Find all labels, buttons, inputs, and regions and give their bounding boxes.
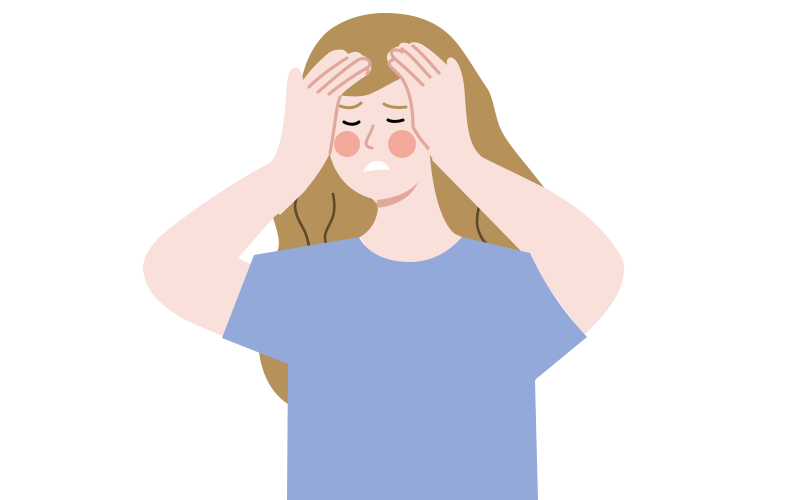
right finger lines — [389, 46, 439, 148]
t-shirt — [222, 237, 587, 500]
right arm — [432, 135, 624, 335]
left finger lines — [309, 58, 370, 153]
left hand — [250, 49, 371, 215]
chin shadow — [377, 182, 418, 208]
hair strands — [295, 185, 486, 246]
right eye — [388, 120, 403, 122]
right hand — [387, 42, 495, 190]
neck and chest — [345, 155, 462, 275]
left palm and fingers — [250, 49, 371, 215]
right cheek — [388, 130, 416, 158]
face shape — [330, 78, 430, 200]
face — [330, 78, 430, 208]
left cheek — [334, 131, 360, 157]
left eyebrow — [340, 103, 361, 108]
right palm and fingers — [387, 42, 495, 190]
left eye — [344, 122, 359, 124]
left arm — [143, 120, 325, 340]
mouth — [363, 161, 390, 172]
hair: back — [259, 13, 546, 404]
right eyebrow — [384, 104, 406, 108]
nose — [366, 126, 373, 148]
